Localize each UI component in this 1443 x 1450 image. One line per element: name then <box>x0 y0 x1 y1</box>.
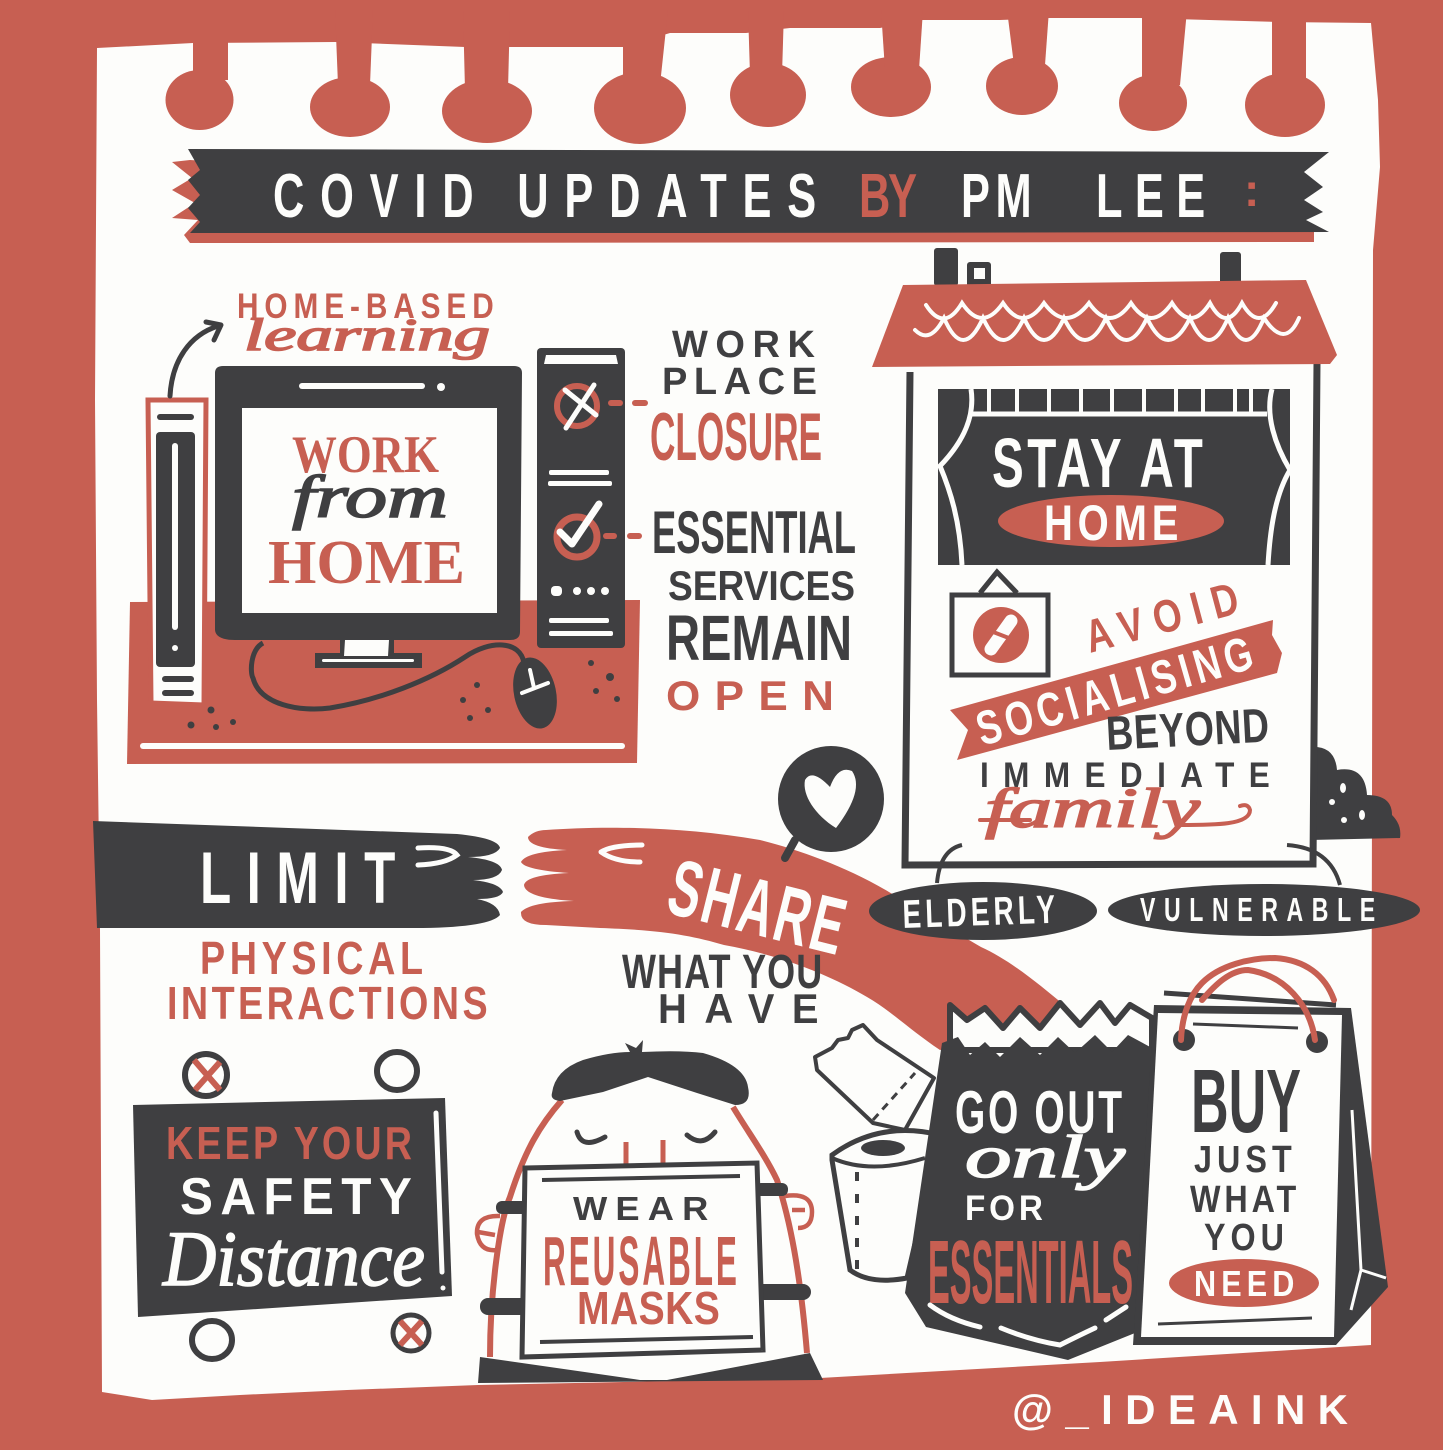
panel: keep your safety distance sign: SAFETY <box>180 1167 412 1225</box>
desk <box>127 600 640 764</box>
screen text: WORK <box>292 426 439 484</box>
title text: : <box>1244 164 1259 216</box>
face <box>577 1132 715 1142</box>
title text <box>273 163 1259 231</box>
window with curtains: HOME <box>1044 495 1178 551</box>
elderly pill <box>869 882 1097 940</box>
panel: paper bag go out only for essentials: FOR <box>965 1189 1043 1228</box>
what you have label: HAVE <box>658 985 819 1032</box>
title text: PM <box>961 163 1032 231</box>
avoid socialising text: SOCIALISING <box>970 626 1259 756</box>
essential services label: ESSENTIAL <box>652 499 856 566</box>
chimneys <box>934 248 1241 287</box>
mask text: WEAR <box>573 1191 708 1228</box>
title text: LEE <box>1096 163 1205 231</box>
avoid socialising text: IMMEDIATE <box>980 757 1270 795</box>
title text: BY <box>859 163 917 231</box>
home-based learning label: HOME-BASED <box>237 287 494 326</box>
cable and mouse <box>251 643 563 733</box>
stay at home text: STAY AT <box>992 424 1203 502</box>
essential services label: OPEN <box>666 673 834 720</box>
panel: paper bag go out only for essentials <box>905 1003 1152 1360</box>
sign circles <box>185 1052 429 1359</box>
screen text: from <box>292 464 448 530</box>
panel: stay at home house <box>872 248 1400 885</box>
physical interactions label <box>167 932 488 1029</box>
hair <box>552 1040 749 1105</box>
icon: no-entry hanging sign <box>952 572 1048 675</box>
vulnerable pill <box>1108 884 1420 936</box>
workplace closure label: CLOSURE <box>650 399 822 475</box>
panel: limit physical interactions: LIMIT <box>200 838 395 919</box>
red hand and sleeve <box>521 828 1064 1050</box>
body outline <box>490 1100 807 1357</box>
home-based learning label: learning <box>244 309 490 360</box>
bag text: YOU <box>1204 1217 1284 1259</box>
title text: COVID UPDATES <box>273 163 816 231</box>
icon: heart speech bubble <box>778 746 884 858</box>
icon: computer tower <box>537 348 648 648</box>
bag text: JUST <box>1194 1139 1292 1181</box>
panel: person wearing reusable mask: REUSABLE <box>543 1222 737 1300</box>
panel: share what you have: SHARE <box>660 841 855 972</box>
screen text: HOME <box>268 529 465 597</box>
panel: keep your safety distance sign <box>133 1052 452 1359</box>
title banner <box>172 149 1329 243</box>
workplace closure label: PLACE <box>662 361 817 403</box>
sign board <box>133 1098 452 1317</box>
what you have label: WHAT YOU <box>622 945 822 998</box>
bag text <box>1190 1052 1301 1259</box>
arrow to home-based learning <box>170 322 221 396</box>
panel: paper bag go out only for essentials: only <box>965 1124 1126 1190</box>
connector hooks <box>937 845 1340 885</box>
panel: shopping bag buy just what you need: NEED <box>1194 1265 1294 1305</box>
panel: person wearing reusable mask: MASKS <box>577 1283 720 1335</box>
bag text: WHAT <box>1190 1179 1297 1221</box>
panel: person wearing reusable mask <box>477 1040 823 1383</box>
avoid socialising text <box>950 572 1282 840</box>
icon: monitor <box>215 366 522 668</box>
essential services label <box>652 499 856 720</box>
home-based learning label <box>237 287 494 360</box>
house wall <box>905 360 1317 865</box>
physical interactions label: INTERACTIONS <box>167 977 488 1029</box>
hands <box>477 1195 812 1250</box>
panel: shopping bag buy just what you need <box>1133 958 1388 1345</box>
credit: @_IDEAINK <box>1012 1386 1348 1433</box>
bag text: GO OUT <box>955 1078 1122 1146</box>
window with curtains <box>938 389 1290 565</box>
bag handles <box>1181 958 1334 1040</box>
physical interactions label: PHYSICAL <box>200 932 423 984</box>
bag text: BUY <box>1191 1052 1301 1152</box>
icon: book <box>148 400 206 705</box>
sign text: KEEP YOUR <box>166 1117 412 1169</box>
avoid socialising text: AVOID <box>1079 572 1244 663</box>
desk speckles <box>188 660 620 730</box>
dark hand <box>93 821 503 928</box>
panel: work from home computer desk <box>127 322 648 764</box>
icon: toilet paper <box>815 1025 940 1280</box>
panel: keep your safety distance sign: Distance <box>162 1215 425 1302</box>
avoid socialising text: BEYOND <box>1105 699 1270 761</box>
screen text <box>268 426 465 597</box>
binder holes <box>166 10 1325 144</box>
essential services label: SERVICES <box>668 562 855 609</box>
mask board <box>522 1163 763 1357</box>
panel: limit physical interactions <box>93 821 503 1029</box>
bush <box>1310 747 1400 840</box>
avoid socialising text: family <box>985 778 1200 840</box>
elderly pill: ELDERLY <box>902 888 1056 937</box>
workplace closure label: WORK <box>672 324 816 366</box>
essential services label: REMAIN <box>666 602 852 674</box>
workplace closure label <box>650 324 822 475</box>
roof <box>872 280 1337 367</box>
panel: share what you have <box>521 828 1064 1050</box>
what you have label <box>622 945 822 1032</box>
torso base <box>478 1353 823 1383</box>
vulnerable pill: VULNERABLE <box>1140 892 1375 929</box>
